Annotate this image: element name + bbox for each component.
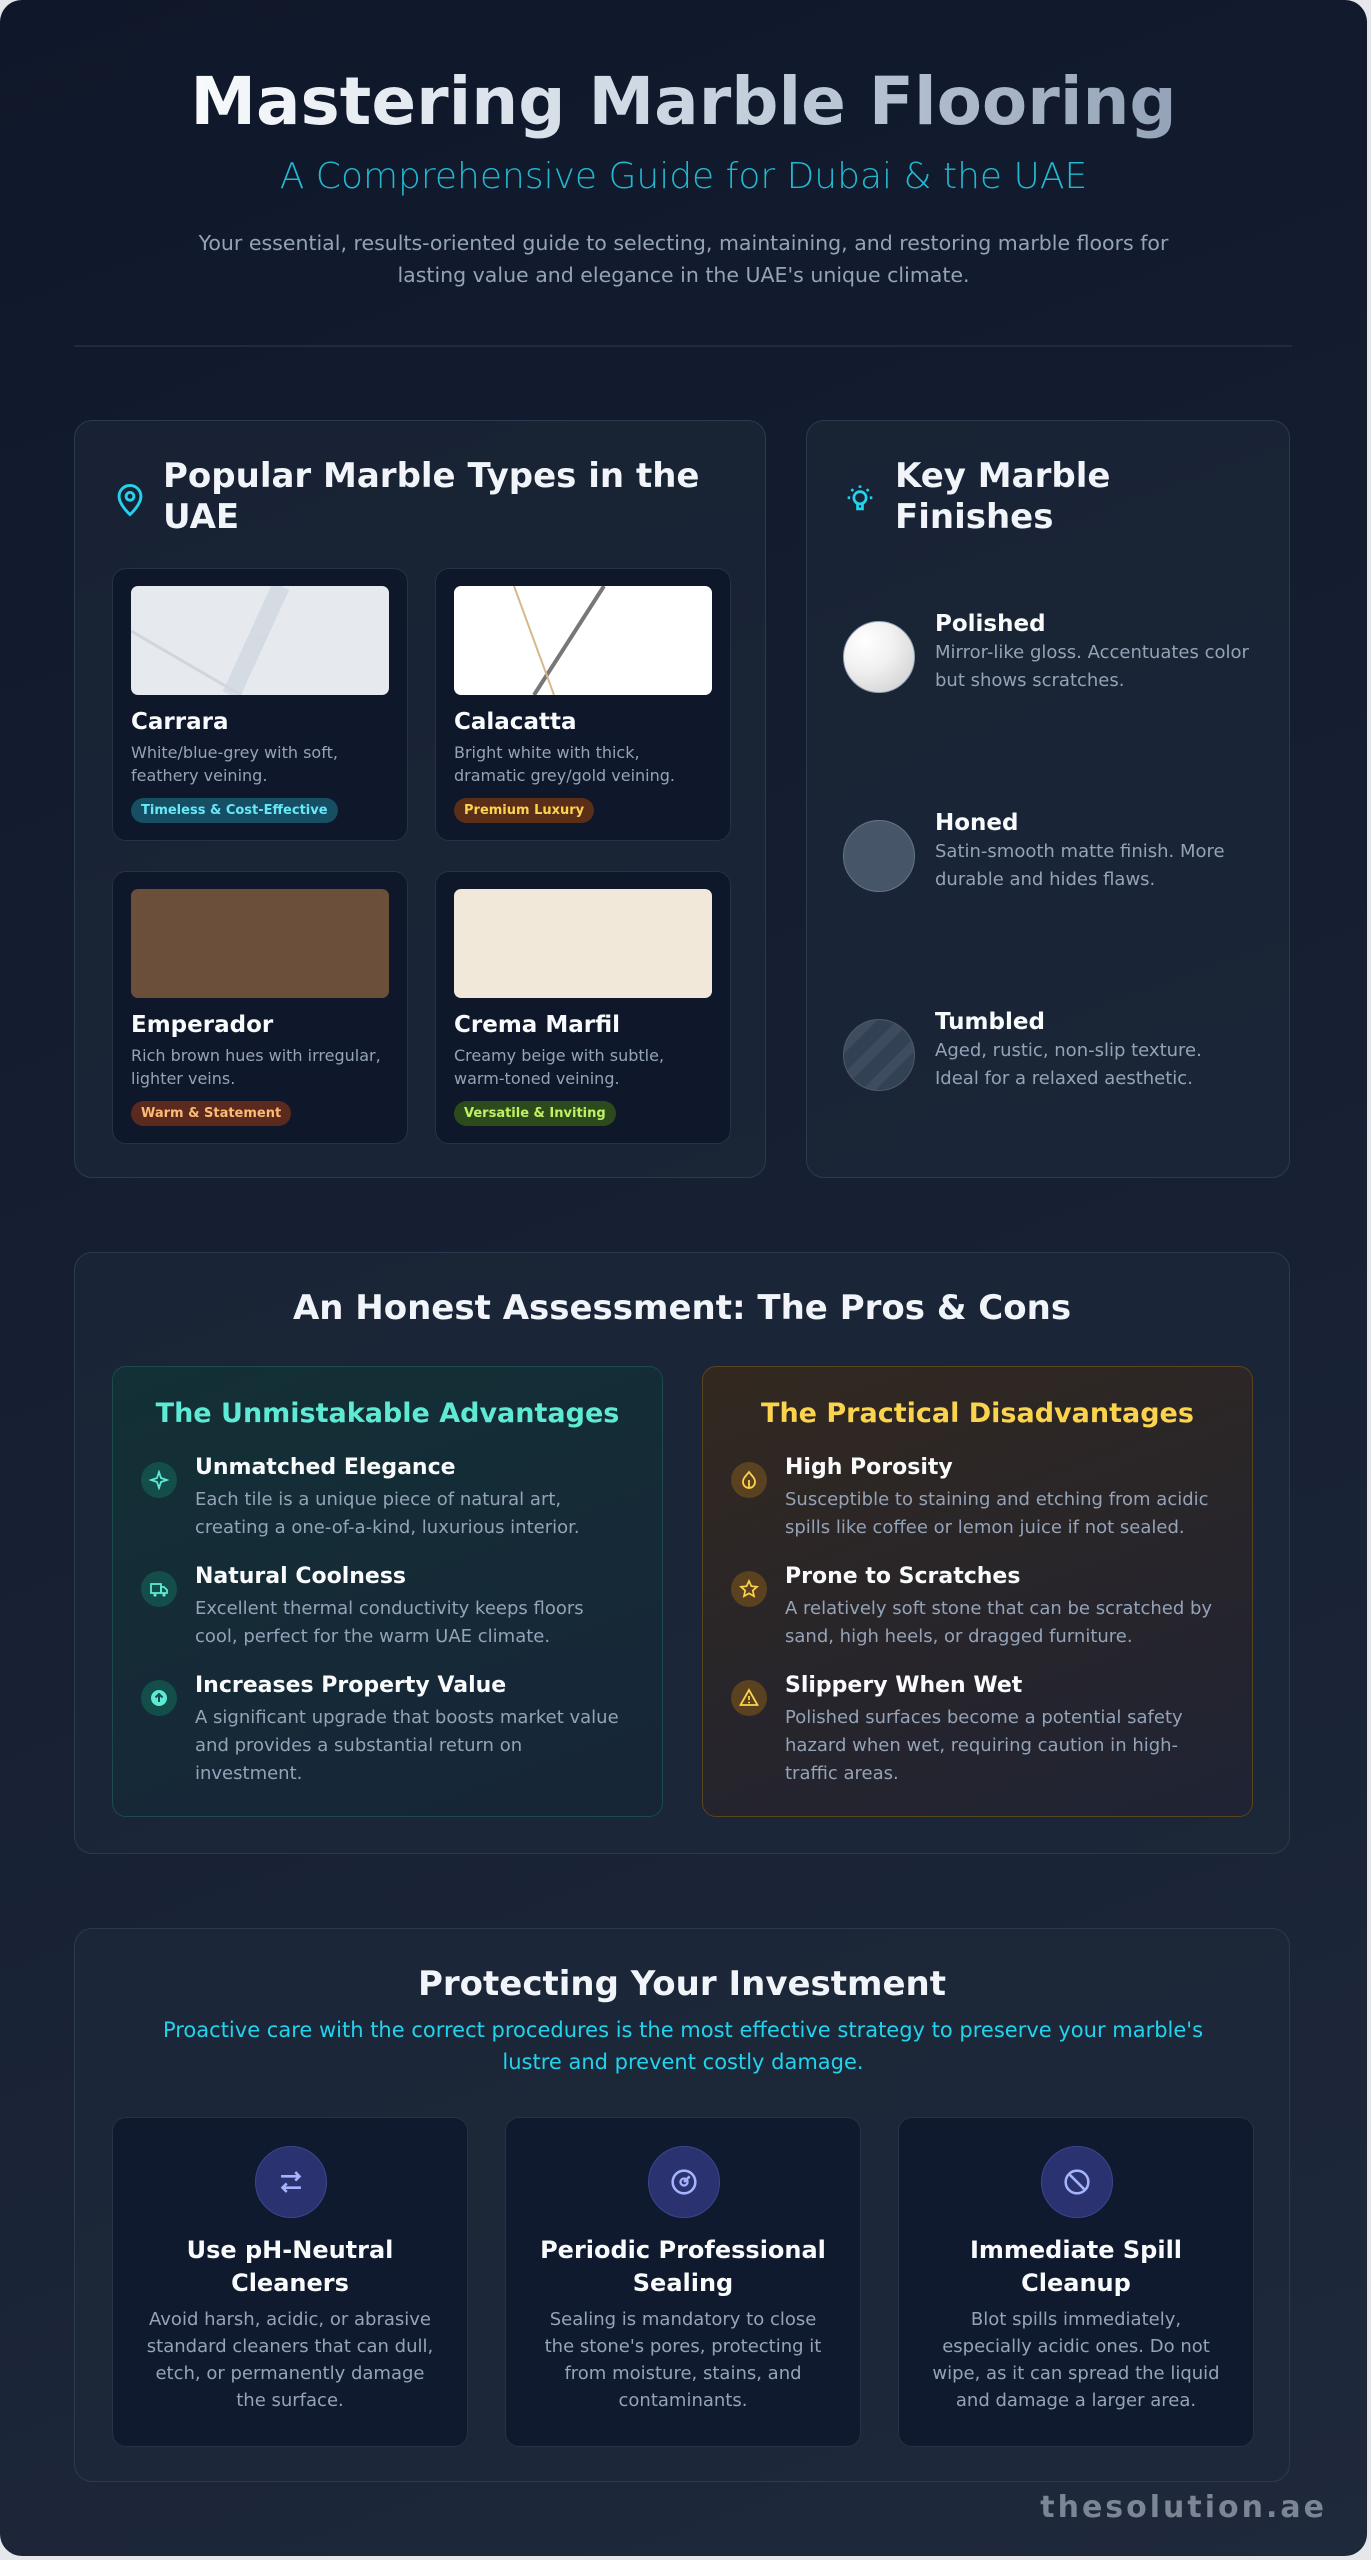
pro item: coolness: Excellent thermal conductivity keeps floors cool, perfect for the warm UAE climate. [195,1598,584,1647]
con item: porosity: Susceptible to staining and etching from acidic spills like coffee or lemon juice if not sealed. [785,1489,1209,1538]
care card: spill cleanup [898,2117,1254,2447]
panel: finishes [806,420,1290,1178]
pros box: The Unmistakable Advantages [156,1398,619,1429]
card: Crema Marfil: Versatile & Inviting [464,1106,606,1121]
heading: Popular Marble Types in the UAE [163,456,699,537]
care card: sealing: Periodic Professional Sealing [540,2236,826,2297]
card: Calacatta: Bright white with thick, dramatic grey/gold veining. [454,743,675,785]
con item: slippery: Slippery When Wet [785,1673,1022,1698]
pro item: elegance: Each tile is a unique piece of natural art, creating a one-of-a-kind, luxurious interior. [195,1489,580,1538]
card: Calacatta [435,568,731,841]
con item: slippery: Polished surfaces become a potential safety hazard when wet, requiring caution in high-traffic areas. [785,1707,1183,1784]
heading: Protecting Your Investment [418,1964,946,2004]
card: Emperador: Emperador [131,1012,273,1038]
card: Carrara: Timeless & Cost-Effective [141,803,328,818]
care card: pH-neutral: Avoid harsh, acidic, or abrasive standard cleaners that can dull, etch, or permanently damage the surface. [147,2309,433,2411]
finish: tumbled: Tumbled [935,1009,1045,1035]
subtitle: Proactive care with the correct procedures is the most effective strategy to preserve your marble's lustre and prevent costly damage. [163,2018,1203,2074]
care card: sealing: Sealing is mandatory to close the stone's pores, protecting it from moisture, stains, and contaminants. [545,2309,821,2411]
pro item: value [141,1673,619,1784]
finish: polished: Mirror-like gloss. Accentuates color [935,642,1249,663]
card: Carrara: White/blue-grey with soft, feathery veining. [131,743,338,785]
finish: tumbled: Aged, rustic, non-slip texture. [935,1040,1202,1061]
care card: spill cleanup: Immediate Spill Cleanup [970,2236,1182,2297]
pro item: elegance: Unmatched Elegance [195,1455,456,1480]
con item: porosity: High Porosity [785,1455,953,1480]
heading: An Honest Assessment: The Pros & Cons [293,1288,1071,1328]
care card: pH-neutral [112,2117,468,2447]
pro item: value: Increases Property Value [195,1673,506,1698]
finish: honed [843,810,1225,892]
con item: scratches [731,1564,1212,1647]
finish: tumbled [843,1009,1202,1091]
card: Crema Marfil: Crema Marfil [454,1012,620,1038]
subtitle: A Comprehensive Guide for Dubai & the UAE [280,156,1087,197]
finish: honed: durable and hides flaws. [935,869,1155,890]
pro item: value: A significant upgrade that boosts market value and provides a substantial return on investment. [195,1707,619,1784]
card: Calacatta: Calacatta [454,709,576,735]
finish: honed: Satin-smooth matte finish. More [935,841,1225,862]
card: Carrara: Carrara [131,709,228,735]
card: Carrara [112,568,408,841]
cons box: The Practical Disadvantages [761,1398,1194,1429]
icon: lightbulb [848,486,872,510]
care card: spill cleanup: Blot spills immediately, especially acidic ones. Do not wipe, as it can spread the liquid and damage a larger area. [932,2309,1220,2411]
con item: scratches: Prone to Scratches [785,1564,1020,1589]
card: Emperador [112,871,408,1144]
panel: protecting investment [74,1928,1290,2482]
care card: pH-neutral: Use pH-Neutral Cleaners [187,2236,393,2297]
pro item: coolness [141,1564,584,1647]
con item: slippery [731,1673,1183,1784]
intro text: Your essential, results-oriented guide to selecting, maintaining, and restoring marble floors for lasting value and elegance in the UAE's unique climate. [199,231,1168,287]
card: Crema Marfil [435,871,731,1144]
pros box [112,1366,663,1817]
finish: polished: but shows scratches. [935,670,1124,691]
finish: honed: Honed [935,810,1018,836]
footer brand: thesolution.ae [1040,2490,1327,2525]
care card: sealing [505,2117,861,2447]
icon: location pin [118,484,142,516]
con item: scratches: A relatively soft stone that can be scratched by sand, high heels, or dragged furniture. [785,1598,1212,1647]
panel: marble types [74,420,766,1178]
card: Emperador: Warm & Statement [141,1106,281,1121]
title: Mastering Marble Flooring [190,63,1177,140]
pro item: coolness: Natural Coolness [195,1564,406,1589]
heading: Key Marble Finishes [895,456,1110,537]
card: Emperador: Rich brown hues with irregular, lighter veins. [131,1046,381,1088]
finish: tumbled: Ideal for a relaxed aesthetic. [935,1068,1193,1089]
finish: polished: Polished [935,611,1046,637]
pro item: elegance [141,1455,580,1538]
card: Calacatta: Premium Luxury [464,803,584,818]
finish: polished [843,611,1249,693]
card: Crema Marfil: Creamy beige with subtle, warm-toned veining. [454,1046,664,1088]
panel: pros & cons [74,1252,1290,1854]
con item: porosity [731,1455,1209,1538]
cons box [702,1366,1253,1817]
